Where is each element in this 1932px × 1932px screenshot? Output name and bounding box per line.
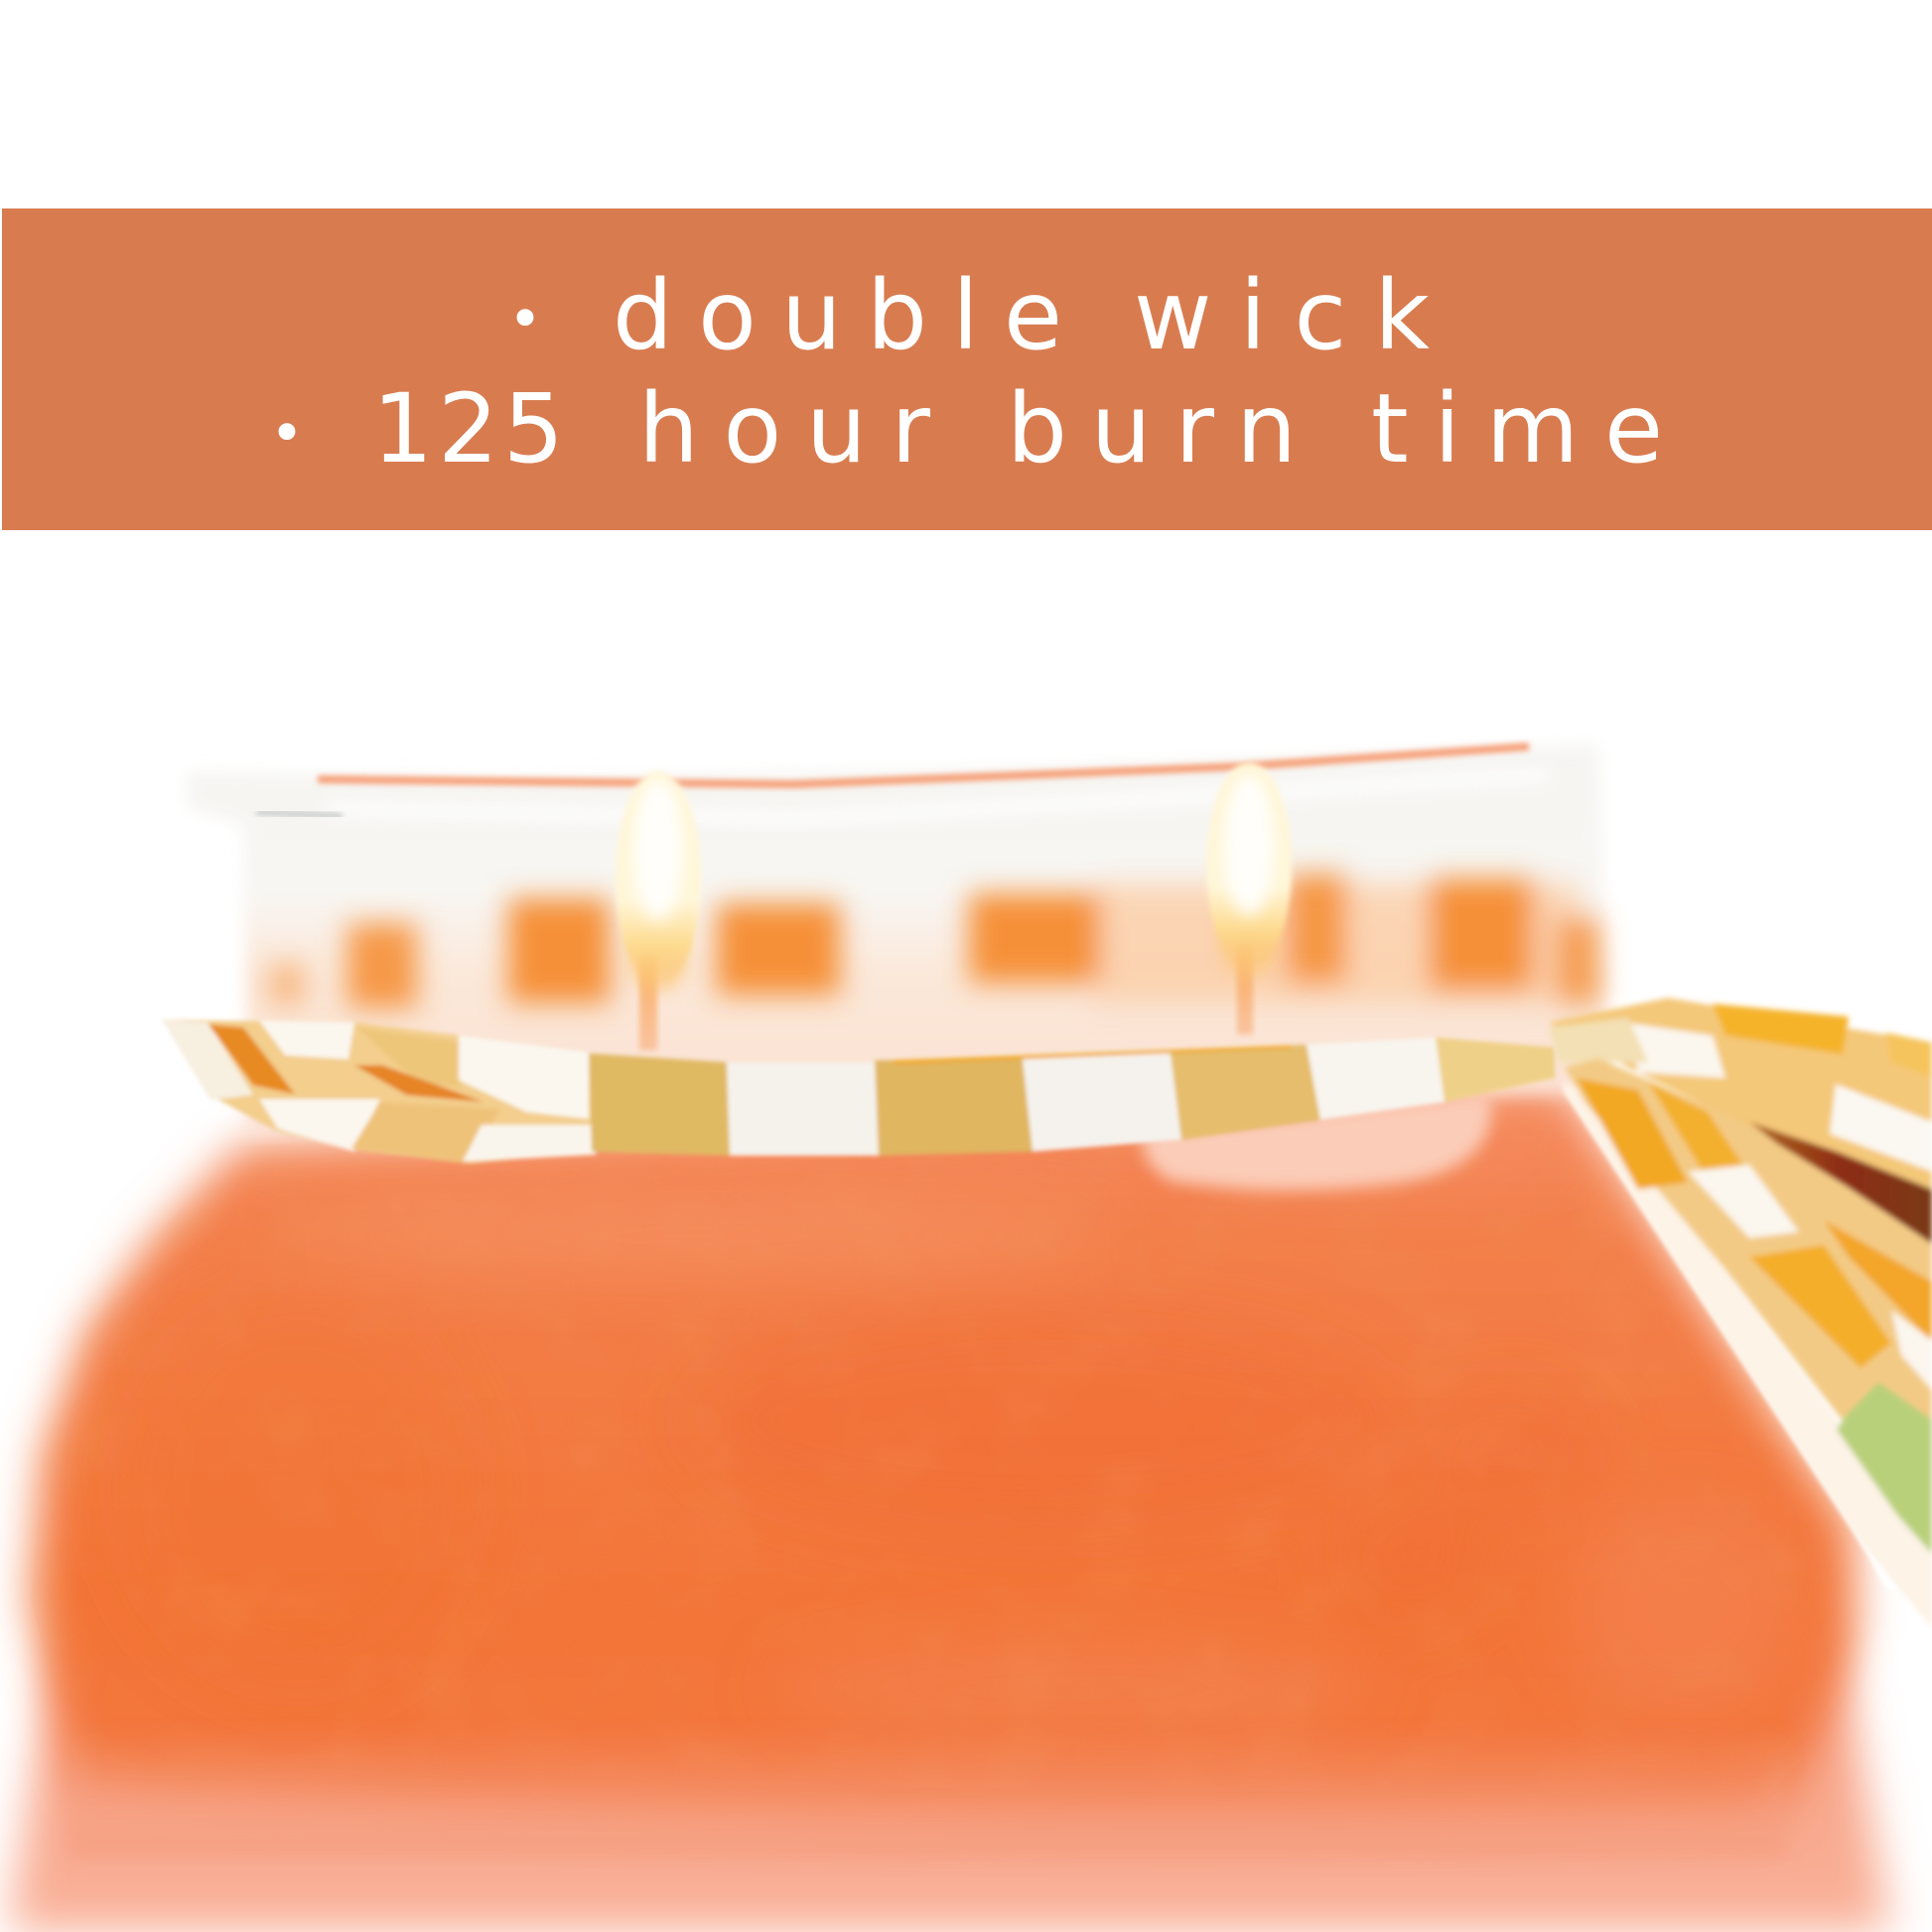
upper tail <box>1549 998 1932 1196</box>
banner line 1: double <box>613 260 1062 371</box>
banner line 1: • <box>508 285 542 352</box>
banner line 1 <box>508 260 1430 371</box>
pale lower wax <box>8 1628 1891 1932</box>
green label <box>1837 1375 1932 1554</box>
right flame <box>1206 762 1292 1035</box>
soft transition to pale wax <box>69 1727 1787 1857</box>
banner background <box>2 208 1932 530</box>
knot and ribbon tails <box>1549 998 1932 1628</box>
glass highlight under ribbon <box>1142 1092 1491 1190</box>
banner line 2: 125 <box>372 373 564 484</box>
ribbon band <box>162 1020 1555 1164</box>
cream jar edge <box>1561 1087 1932 1628</box>
tail shadow <box>1749 1122 1932 1244</box>
glass jar neck <box>187 745 1606 1132</box>
candle jar photo <box>0 745 1932 1932</box>
area right of jar edge <box>1561 993 1932 1588</box>
ribbon left fold <box>162 1020 602 1164</box>
orange rim line <box>318 747 1529 784</box>
reflected gingham in wax <box>270 874 1598 1008</box>
rim shadow <box>256 812 343 816</box>
banner line 2: time <box>1371 373 1663 484</box>
wax grain <box>0 1092 1932 1807</box>
wax mottling <box>119 1106 1807 1737</box>
lower tail <box>1565 1058 1932 1420</box>
ribbon checks <box>589 1053 730 1156</box>
banner line 2: • <box>270 399 304 467</box>
glass highlight <box>328 774 1549 819</box>
left flame <box>616 771 701 1050</box>
banner line 2: burn <box>1007 373 1297 484</box>
banner line 1: wick <box>1134 260 1430 371</box>
banner line 2: hour <box>638 373 931 484</box>
wax body <box>31 1082 1855 1827</box>
banner line 2 <box>270 373 1663 484</box>
banner <box>2 208 1932 530</box>
